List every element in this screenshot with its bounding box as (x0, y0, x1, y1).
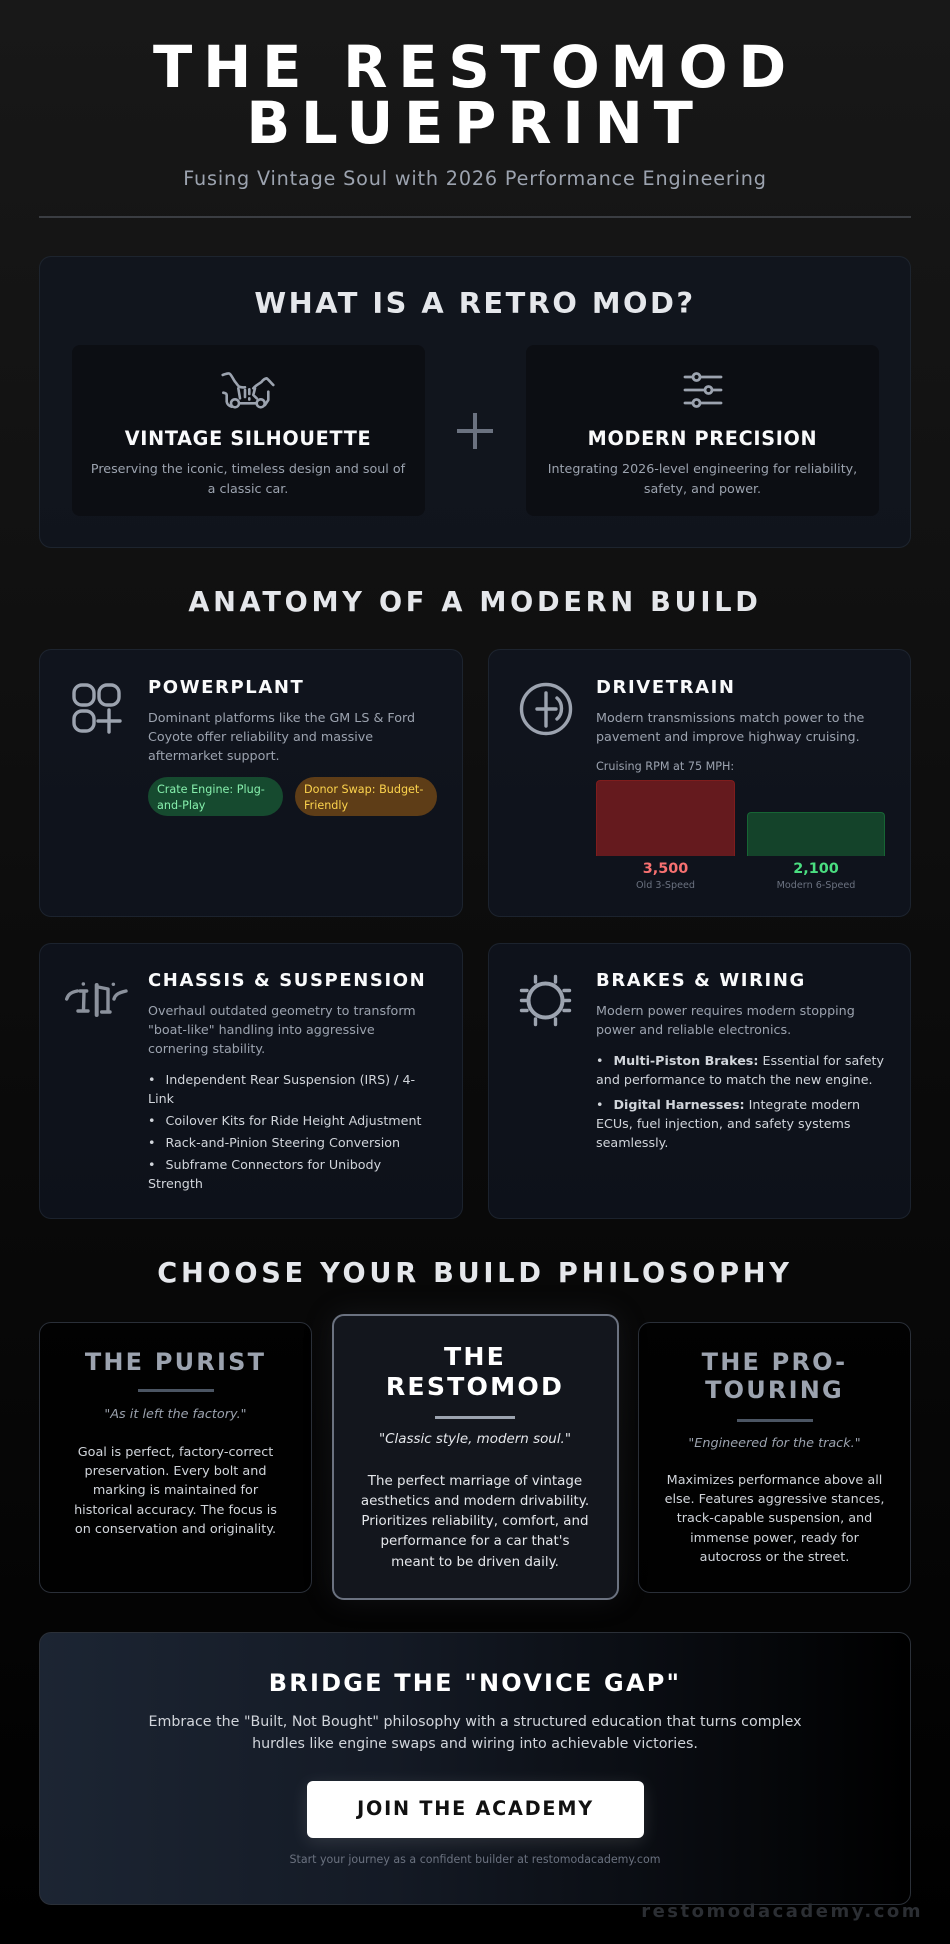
heading: vintage silhouette: VINTAGE SILHOUETTE (125, 427, 371, 450)
list item: Independent Rear Suspension (IRS) / 4- (166, 1072, 415, 1087)
panel: what is a retro mod (39, 256, 911, 548)
description: Goal is perfect, factory-correct (78, 1445, 273, 1460)
description (74, 1445, 277, 1537)
description: performance for a car that's (380, 1534, 570, 1549)
title (153, 34, 797, 157)
pill: crate engine: Crate Engine: Plug- (157, 783, 265, 796)
description: "boat-like" handling into aggressive (148, 1022, 375, 1037)
description: power and reliable electronics. (596, 1022, 791, 1037)
description (548, 461, 857, 496)
button: join the academy: JOIN THE ACADEMY (357, 1797, 594, 1820)
description: a classic car. (208, 481, 288, 496)
label: old 3-speed: Old 3-Speed (636, 880, 695, 891)
title: THE RESTOMOD (153, 34, 797, 101)
pill: crate engine (148, 777, 283, 816)
chart label: Cruising RPM at 75 MPH: (596, 760, 734, 773)
heading: the restomod: RESTOMOD (386, 1372, 564, 1401)
list item: Strength (148, 1176, 203, 1191)
feature list (148, 1072, 422, 1191)
icon: sliders (684, 372, 722, 408)
heading: the pro-touring: THE PRO- (702, 1348, 847, 1376)
divider (737, 1419, 813, 1422)
description: track-capable suspension, and (677, 1511, 872, 1526)
heading: what is a retro mod: WHAT IS A RETRO MOD? (254, 286, 696, 320)
heading: the restomod (386, 1342, 564, 1401)
list item (148, 1072, 415, 1106)
description (596, 1003, 855, 1037)
pill: donor swap: Friendly (304, 799, 348, 812)
description: immense power, ready for (690, 1531, 859, 1546)
description (148, 1714, 802, 1752)
heading: modern precision: MODERN PRECISION (588, 427, 817, 450)
description: Embrace the "Built, Not Bought" philosophy with a structured education that turns complex (148, 1714, 802, 1730)
description: Modern power requires modern stopping (596, 1003, 855, 1018)
list item: Coilover Kits for Ride Height Adjustment (166, 1113, 422, 1128)
bar: old 3-speed (596, 780, 735, 856)
description: cornering stability. (148, 1041, 265, 1056)
card: the restomod (332, 1314, 618, 1600)
list item (596, 1053, 884, 1087)
list item (596, 1097, 860, 1150)
description: Dominant platforms like the GM LS & Ford (148, 710, 415, 725)
list item: • (148, 1113, 155, 1128)
bar: modern 6-speed (747, 812, 885, 856)
description: safety, and power. (644, 481, 761, 496)
icon: plus (457, 413, 493, 449)
description: aftermarket support. (148, 748, 280, 763)
description: Preserving the iconic, timeless design and soul of (91, 461, 405, 476)
value: 2,100: 2,100 (793, 861, 839, 877)
label: modern 6-speed: Modern 6-Speed (777, 880, 855, 891)
description: on conservation and originality. (75, 1522, 276, 1537)
description (148, 710, 415, 763)
quote: "Classic style, modern soul." (379, 1432, 571, 1447)
description: marking is maintained for (93, 1483, 258, 1498)
description (91, 461, 406, 496)
description: Integrating 2026-level engineering for reliability, (548, 461, 857, 476)
footnote: Start your journey as a confident builder at restomodacademy.com (290, 1853, 660, 1866)
description (361, 1474, 589, 1570)
list item: Digital Harnesses: Integrate modern (614, 1097, 860, 1112)
list item: Multi-Piston Brakes: Essential for safety (614, 1053, 884, 1068)
header divider (39, 216, 911, 218)
panel: call to action (39, 1632, 911, 1905)
description: Prioritizes reliability, comfort, and (361, 1514, 589, 1529)
divider (138, 1389, 214, 1392)
icon: vintage car (221, 372, 275, 409)
list item: seamlessly. (596, 1135, 668, 1150)
card: vintage silhouette (72, 345, 424, 516)
description: else. Features aggressive stances, (665, 1492, 884, 1507)
heading: brakes and wiring: BRAKES & WIRING (596, 970, 806, 991)
heading: bridge the novice gap: BRIDGE THE "NOVICE GAP" (269, 1669, 681, 1697)
card: modern precision (526, 345, 879, 516)
heading: chassis and suspension: CHASSIS & SUSPENSION (148, 970, 426, 991)
list item: and performance to match the new engine. (596, 1072, 873, 1087)
card: drivetrain (488, 649, 911, 917)
card: brakes and wiring (488, 943, 911, 1219)
heading: the purist: THE PURIST (85, 1348, 266, 1376)
description: autocross or the street. (700, 1550, 849, 1565)
pill: crate engine: and-Play (157, 799, 205, 812)
heading: drivetrain: DRIVETRAIN (596, 677, 736, 698)
title: BLUEPRINT (246, 90, 704, 157)
description: aesthetics and modern drivability. (361, 1494, 589, 1509)
icon: brake disc (520, 974, 572, 1026)
button: join the academy (307, 1781, 644, 1838)
list item: • (596, 1053, 603, 1068)
list item: • (148, 1157, 155, 1172)
card: the pro-touring (638, 1322, 911, 1593)
pill: donor swap (295, 777, 437, 816)
icon: suspension (65, 982, 128, 1017)
card: the purist (39, 1322, 312, 1593)
description: meant to be driven daily. (391, 1555, 559, 1570)
list item: • (148, 1072, 155, 1087)
list item: Link (148, 1091, 174, 1106)
heading: the restomod: THE (444, 1342, 506, 1371)
feature list (596, 1053, 884, 1150)
quote: "As it left the factory." (104, 1407, 247, 1422)
heading: anatomy of a modern build: ANATOMY OF A MODERN BUILD (188, 587, 762, 618)
description: Coyote offer reliability and massive (148, 729, 373, 744)
icon: engine blocks (72, 683, 122, 734)
list item: • (148, 1135, 155, 1150)
description: historical accuracy. The focus is (74, 1503, 277, 1518)
list item: Subframe Connectors for Unibody (166, 1157, 381, 1172)
quote: "Engineered for the track." (688, 1436, 861, 1451)
description: The perfect marriage of vintage (368, 1474, 582, 1489)
description (665, 1473, 884, 1565)
description: Overhaul outdated geometry to transform (148, 1003, 416, 1018)
description: Maximizes performance above all (667, 1473, 882, 1488)
divider (434, 1416, 514, 1419)
description: Modern transmissions match power to the (596, 710, 864, 725)
heading: choose your build philosophy: CHOOSE YOUR BUILD PHILOSOPHY (157, 1258, 793, 1289)
heading: the pro-touring: TOURING (705, 1376, 844, 1404)
value: 3,500: 3,500 (643, 861, 688, 877)
description: pavement and improve highway cruising. (596, 729, 860, 744)
heading: powerplant: POWERPLANT (148, 677, 304, 698)
icon: gear selector (520, 682, 572, 736)
watermark: restomodacademy.com (641, 1901, 923, 1922)
list item: Rack-and-Pinion Steering Conversion (166, 1135, 400, 1150)
card: powerplant (39, 649, 463, 917)
list item (148, 1157, 381, 1191)
subtitle: Fusing Vintage Soul with 2026 Performance Engineering (183, 167, 767, 190)
description (596, 710, 864, 744)
description: hurdles like engine swaps and wiring into achievable victories. (252, 1736, 698, 1752)
bar chart (596, 780, 885, 891)
list item: • (596, 1097, 603, 1112)
heading: the pro-touring (702, 1348, 847, 1404)
description (148, 1003, 416, 1056)
pill: donor swap: Donor Swap: Budget- (304, 783, 423, 796)
list item: ECUs, fuel injection, and safety systems (596, 1116, 851, 1131)
description: preservation. Every bolt and (85, 1464, 266, 1479)
card: chassis and suspension (39, 943, 463, 1219)
